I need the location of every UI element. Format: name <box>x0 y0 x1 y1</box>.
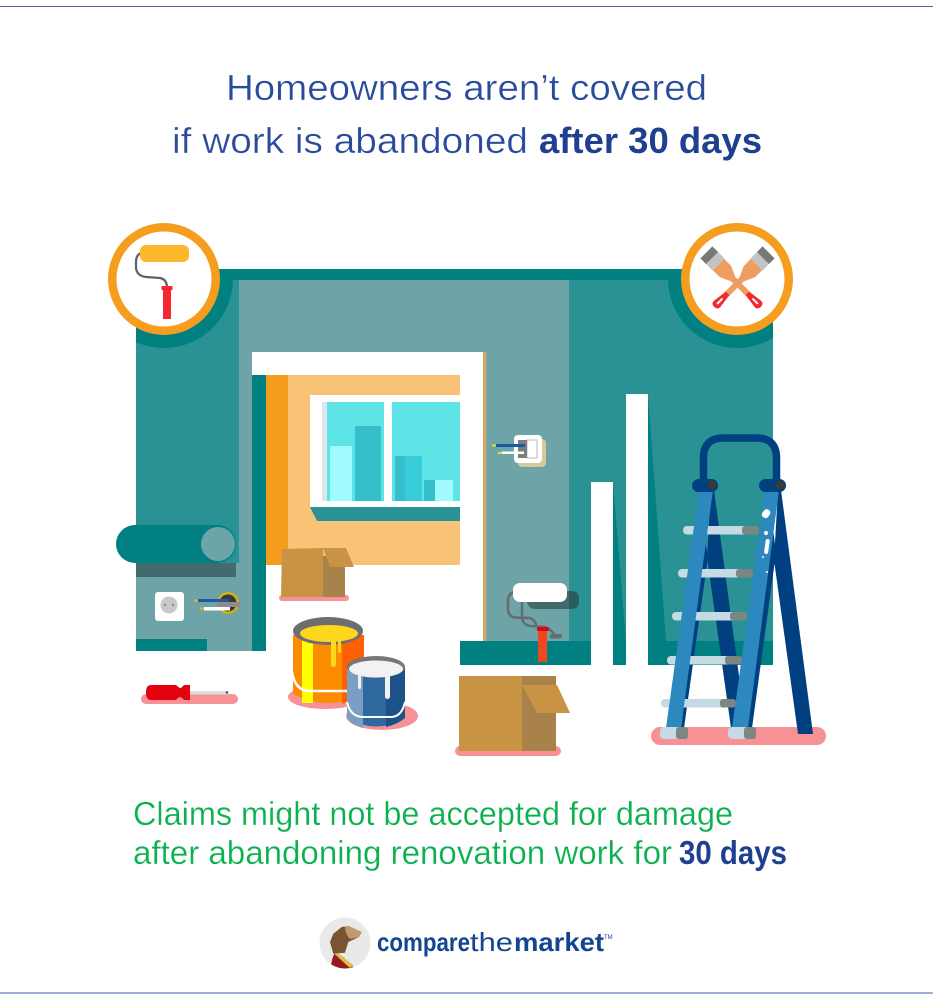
wordmark: compare <box>377 927 470 957</box>
title: after 30 days <box>539 120 762 161</box>
small cardboard box <box>279 548 354 601</box>
ladder handle <box>692 438 786 492</box>
caption: after abandoning renovation work for <box>133 834 672 871</box>
exposed wires right <box>492 435 546 467</box>
leaning planks <box>591 394 648 665</box>
wordmark <box>377 927 613 957</box>
caption: Claims might not be accepted for damage <box>133 795 733 832</box>
large paint can <box>288 617 364 709</box>
wordmark: the <box>470 927 513 957</box>
room illustration <box>116 269 826 756</box>
title: Homeowners aren’t covered <box>226 67 707 108</box>
front ladder legs <box>666 490 779 728</box>
power socket <box>155 592 184 621</box>
ladder steps <box>661 526 759 708</box>
small paint can <box>346 656 418 730</box>
brush <box>708 246 775 313</box>
wordmark: TM <box>604 935 613 941</box>
paint splashes <box>761 508 772 573</box>
rear ladder frame <box>681 490 813 734</box>
icon: crossed paint brushes badge <box>668 223 793 348</box>
caption <box>133 795 787 871</box>
icon: paint roller badge <box>108 223 233 348</box>
wordmark: market <box>514 927 604 957</box>
doorway <box>252 352 486 665</box>
window <box>310 395 460 521</box>
title <box>172 67 762 161</box>
large cardboard box <box>455 676 570 756</box>
wall paint roller <box>508 583 579 662</box>
screwdriver <box>141 685 238 704</box>
back wall <box>136 269 773 665</box>
stepladder <box>651 438 826 745</box>
exposed wires left <box>194 592 240 614</box>
logo: compare the market <box>320 918 613 972</box>
title: if work is abandoned <box>172 120 528 161</box>
icon: meerkat <box>320 918 370 972</box>
ladder feet <box>660 727 756 739</box>
wall roller tube <box>116 525 236 577</box>
caption: 30 days <box>679 834 787 871</box>
brush <box>700 246 767 313</box>
